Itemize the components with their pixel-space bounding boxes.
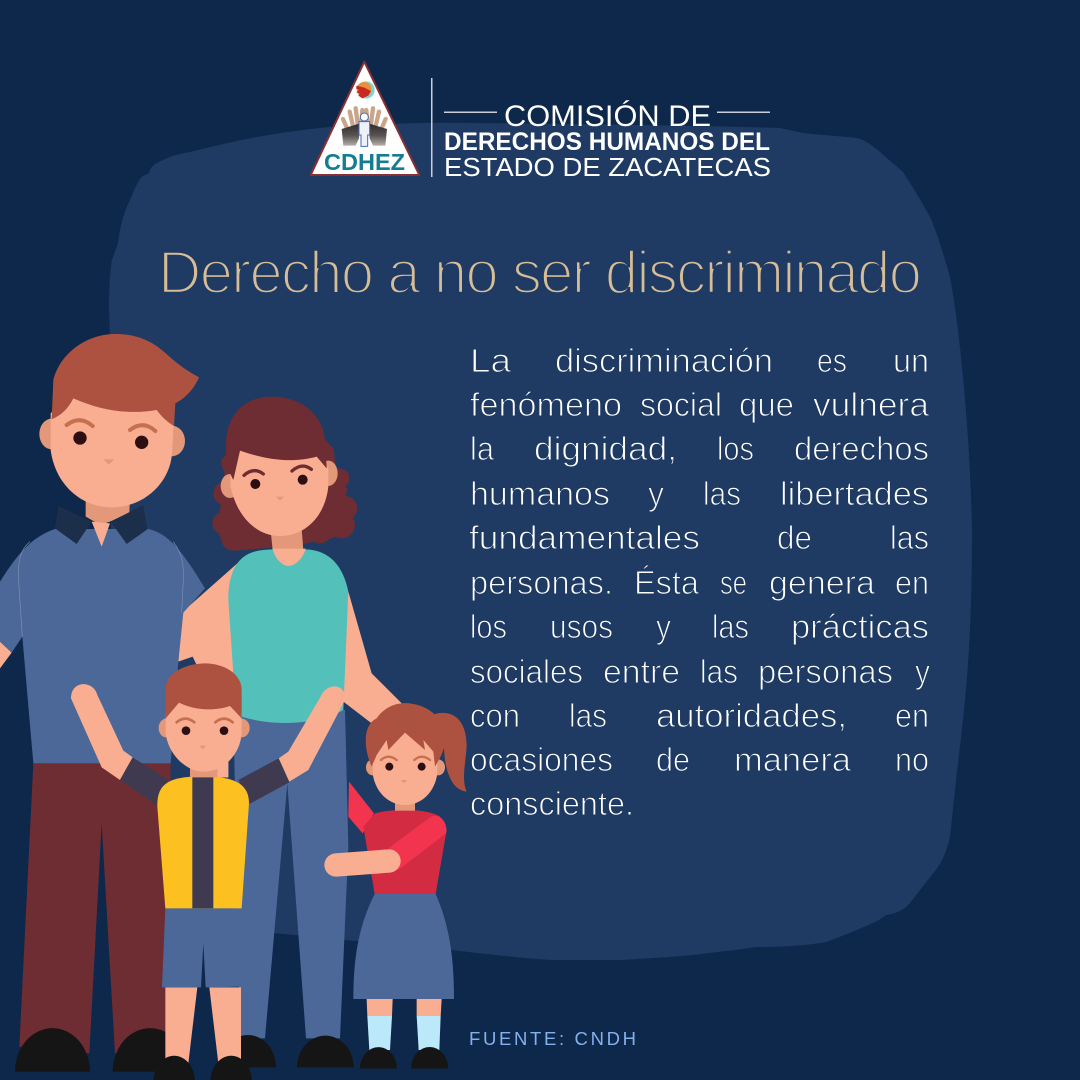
woman [178, 397, 405, 1067]
woman back hair [212, 440, 357, 551]
body text block: social [640, 386, 722, 423]
body text block [469, 342, 930, 822]
source note: FUENTE: CNDH [469, 1028, 636, 1049]
body text block: en [895, 564, 929, 601]
girl ears [366, 759, 379, 775]
body text block: las [569, 697, 607, 734]
body text block: y [648, 475, 664, 512]
logo triangle [311, 62, 419, 175]
girl hair [366, 703, 445, 767]
man hair [52, 334, 199, 426]
body text block: discriminación [555, 342, 773, 379]
body text block: las [712, 608, 749, 645]
body text block: humanos [470, 475, 610, 512]
body text block: usos [550, 608, 613, 645]
body text block: las [890, 519, 929, 556]
boy shorts [162, 908, 244, 987]
girl back arm [348, 782, 374, 833]
girl sleeve [388, 816, 446, 870]
boy sleeves [120, 757, 289, 805]
body text block: de [656, 741, 690, 778]
body text block: un [893, 342, 929, 379]
body text block: consciente. [470, 785, 634, 822]
logo divider [431, 78, 432, 177]
woman shoes [220, 1035, 354, 1067]
girl forearm [336, 861, 389, 865]
body text block: personas [758, 653, 893, 690]
man collar [55, 505, 147, 544]
body text block: manera [734, 741, 852, 778]
man features [67, 420, 155, 465]
body text block: y [915, 653, 930, 690]
man shirt [0, 529, 205, 763]
girl socks [367, 1016, 441, 1050]
woman arms [178, 563, 405, 723]
body text block: se [720, 564, 747, 601]
logo: CDHEZ [311, 62, 771, 182]
man face [51, 387, 174, 507]
boy [71, 663, 345, 1080]
body text block: la [470, 430, 495, 467]
body text block: sociales [470, 653, 583, 690]
body text block: dignidad, [534, 430, 677, 467]
body text block: con [470, 697, 520, 734]
woman face [230, 447, 328, 536]
body text block: Ésta [634, 564, 700, 601]
illustration: family [0, 334, 467, 1080]
body text block: autoridades, [656, 697, 847, 734]
boy neck [190, 762, 228, 777]
body text block: personas. [470, 564, 613, 601]
body text block: genera [769, 564, 876, 601]
boy arms [71, 684, 345, 782]
man shoes [15, 1028, 188, 1072]
boy face [166, 697, 242, 772]
logo hands and person [342, 108, 387, 146]
boy ears [159, 719, 173, 737]
man [0, 334, 205, 1072]
body text block: que [739, 386, 794, 423]
body text block: prácticas [791, 608, 929, 645]
girl legs [367, 999, 442, 1016]
body text block: ocasiones [470, 741, 613, 778]
woman neckline [273, 549, 306, 566]
girl ponytail [432, 713, 467, 792]
body text block: derechos [794, 430, 929, 467]
girl [336, 703, 467, 1069]
body text block: las [700, 653, 738, 690]
man neck [86, 497, 130, 525]
woman neck [271, 528, 303, 551]
woman legs [233, 710, 348, 1038]
woman ears [221, 474, 239, 498]
body text block: las [703, 475, 741, 512]
woman features [244, 466, 311, 501]
body text block: no [895, 741, 929, 778]
boy shoes [153, 1056, 252, 1080]
body text block: La [470, 342, 512, 379]
boy legs [165, 987, 241, 1063]
logo acronym: CDHEZ [324, 149, 405, 175]
title: Derecho a no ser discriminado [158, 239, 922, 306]
body text block: es [817, 342, 847, 379]
boy vest [157, 777, 249, 908]
body text block: fenómeno [470, 386, 622, 423]
girl neck [395, 800, 415, 811]
body text block: los [717, 430, 754, 467]
body text block: de [777, 519, 812, 556]
logo wordmark: ESTADO DE ZACATECAS [444, 152, 771, 182]
logo wordmark [444, 100, 771, 182]
man left hand [0, 642, 12, 668]
girl features [381, 757, 430, 783]
body text block: los [470, 608, 507, 645]
girl shoes [360, 1047, 448, 1069]
body text block: y [656, 608, 671, 645]
boy hair [166, 663, 242, 718]
logo sun [356, 81, 375, 99]
girl skirt [353, 894, 454, 999]
logo wordmark: DERECHOS HUMANOS DEL [444, 128, 770, 156]
man ears [39, 419, 64, 449]
body text block: entre [603, 653, 680, 690]
body text block: fundamentales [469, 519, 700, 556]
panel: organic blob [109, 123, 972, 960]
boy features [177, 719, 233, 749]
girl shirt [363, 810, 447, 894]
body text block: vulnera [813, 386, 930, 423]
girl face [373, 727, 437, 805]
body text block: en [895, 697, 929, 734]
man trousers [19, 763, 171, 1053]
body text block: libertades [780, 475, 929, 512]
woman top [228, 549, 348, 723]
logo wordmark: COMISIÓN DE [504, 100, 711, 133]
woman hair [226, 397, 327, 480]
